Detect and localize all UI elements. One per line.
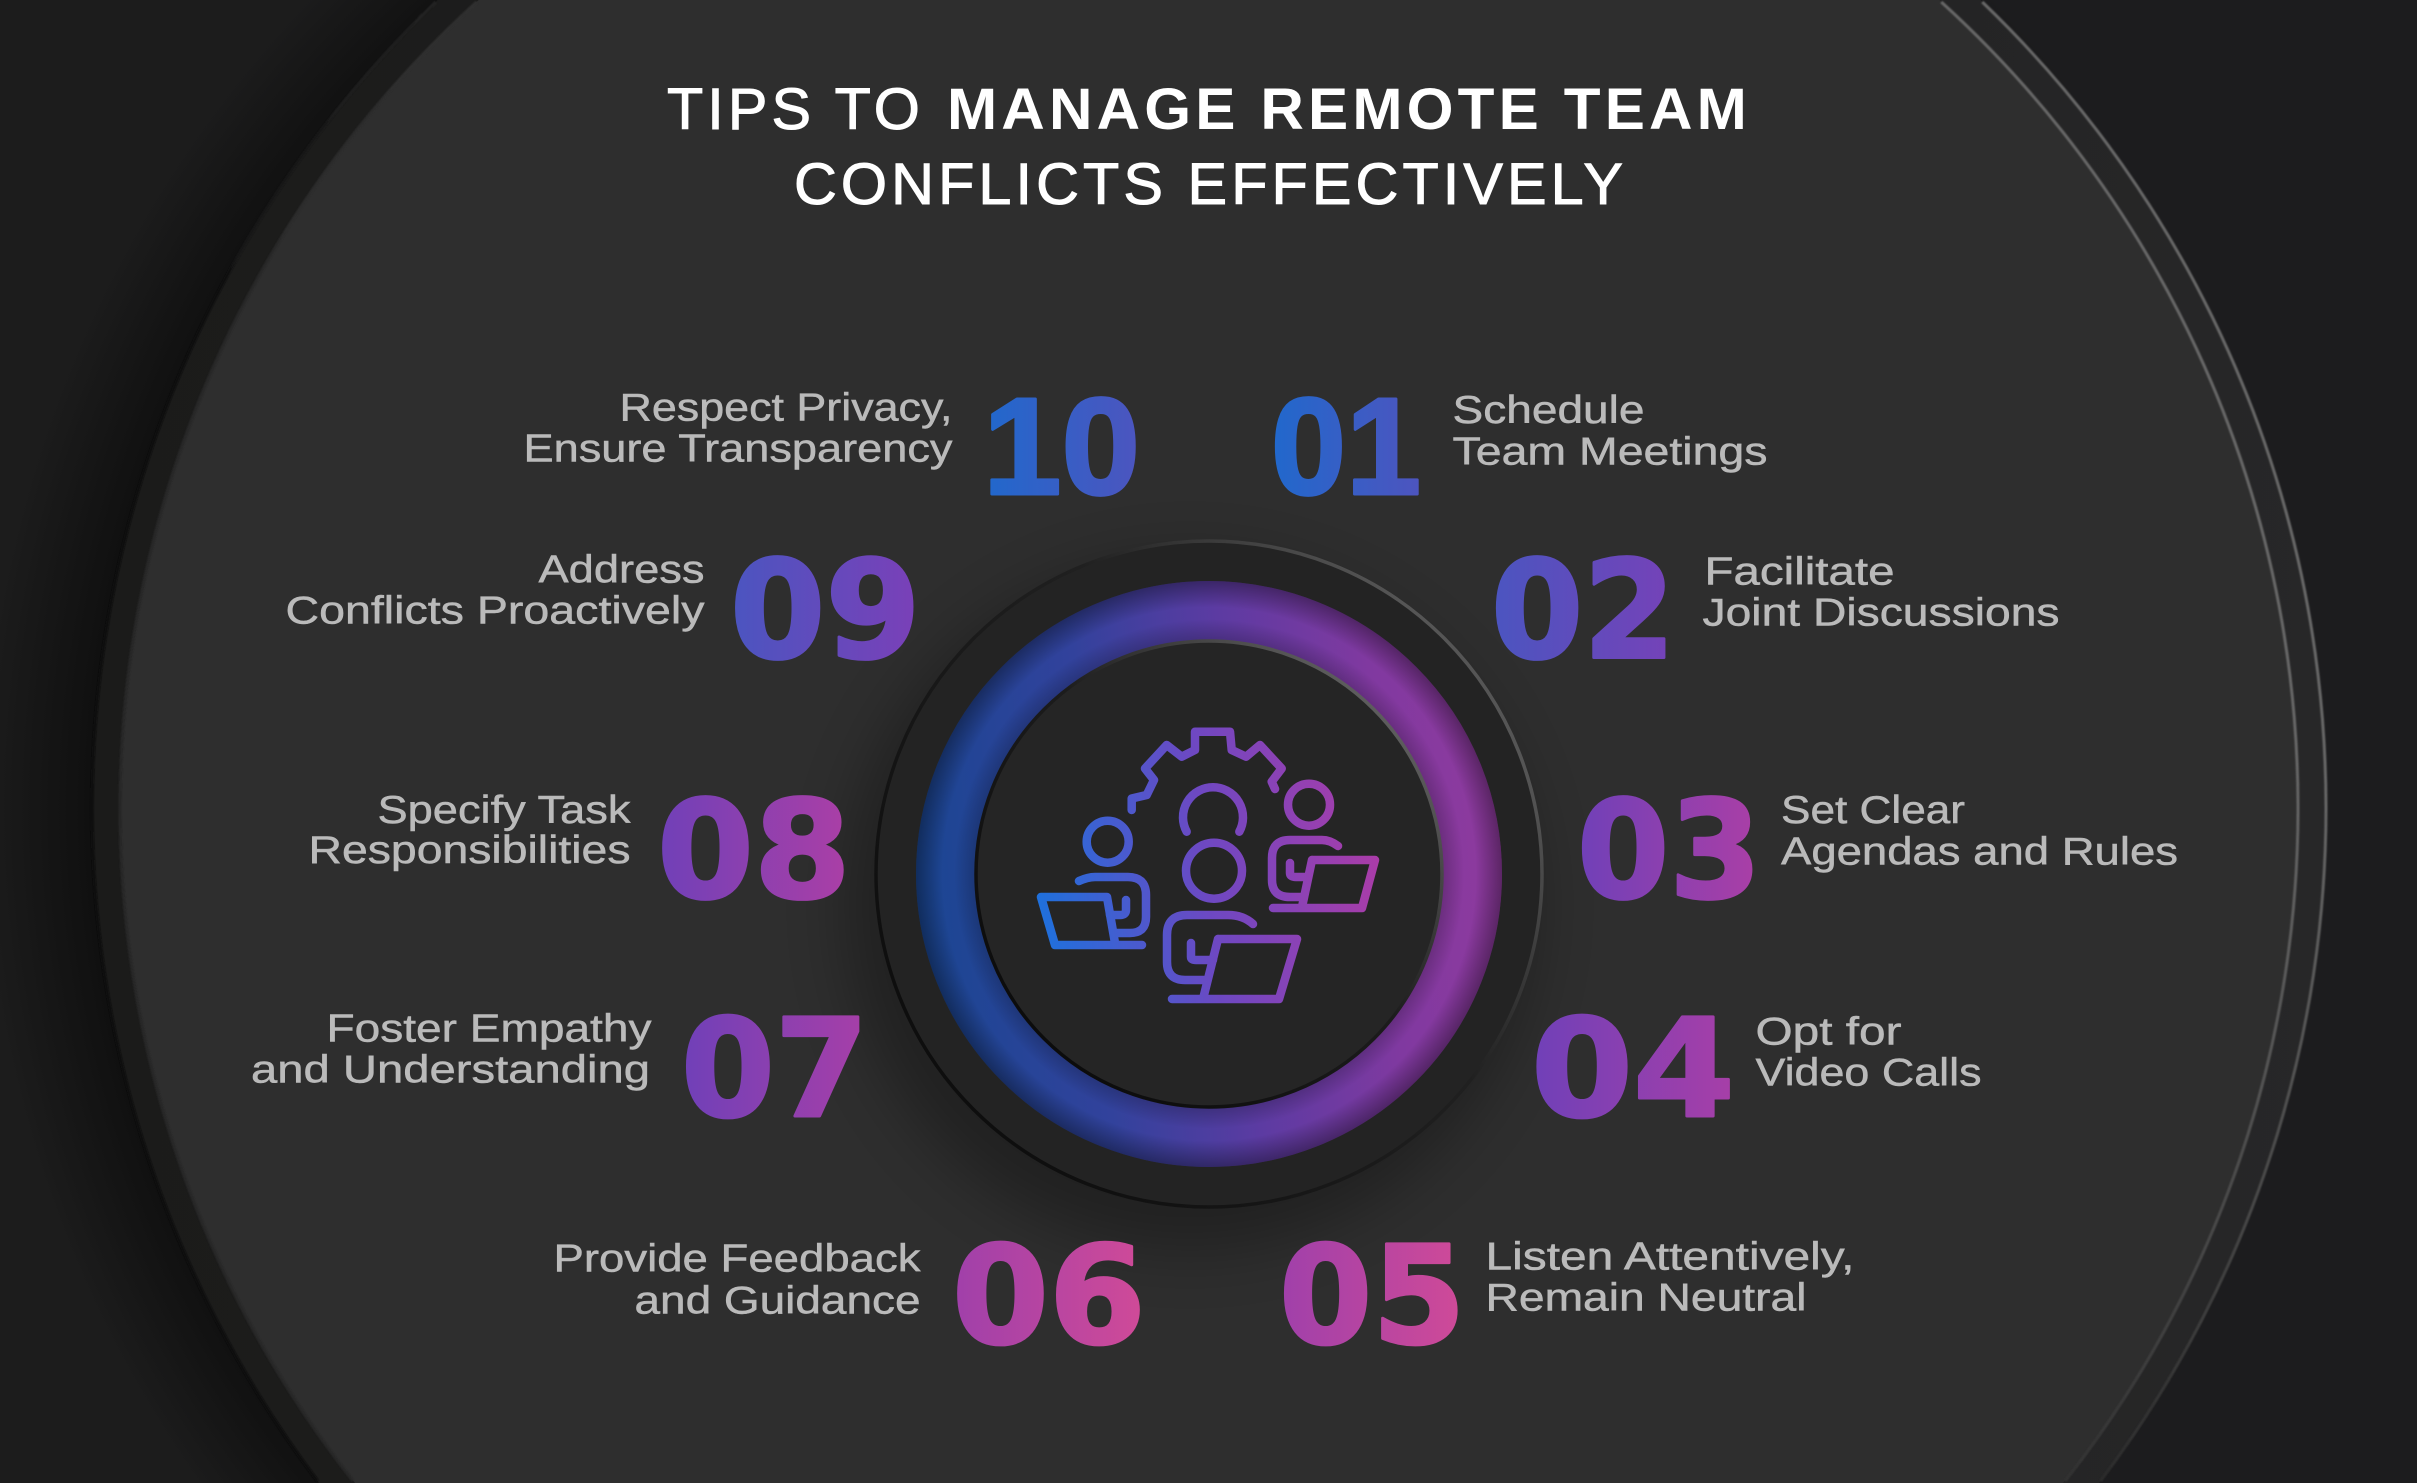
tip 08 — [308, 772, 851, 930]
label 07 line 2: and Understanding — [251, 1048, 650, 1092]
tip 09 — [286, 532, 921, 690]
label 10 line 2: Ensure Transparency — [524, 428, 953, 470]
tip 06 — [554, 1218, 1146, 1376]
hub inner disc — [976, 641, 1442, 1107]
gradient ring — [946, 611, 1472, 1137]
number 05: 05 — [1279, 1218, 1466, 1376]
label 05 line 1: Listen Attentively, — [1486, 1236, 1854, 1278]
hub outer disc — [876, 541, 1542, 1207]
label 09 line 2: Conflicts Proactively — [286, 590, 705, 632]
label 01 line 1: Schedule — [1452, 389, 1644, 432]
label 08 line 1: Specify Task — [378, 789, 631, 832]
icon: centre person — [1167, 843, 1297, 999]
tip 10 — [524, 370, 1140, 524]
label 10 line 1: Respect Privacy, — [620, 386, 952, 430]
icon: remote team with gear and laptops — [1041, 732, 1375, 999]
icon: left person — [1041, 821, 1146, 945]
icon: right person — [1272, 784, 1375, 908]
tip 01 — [1271, 370, 1768, 524]
title — [667, 77, 1751, 217]
title line 1 light part: TIPS TO — [667, 77, 924, 142]
tip 04 — [1531, 991, 1982, 1149]
centre disc shadow — [845, 560, 1535, 1250]
tip 02 — [1491, 532, 2060, 690]
number 06: 06 — [952, 1218, 1146, 1376]
tip 03 — [1577, 772, 2178, 930]
label 06 line 1: Provide Feedback — [554, 1238, 921, 1280]
centre hub — [876, 541, 1542, 1207]
number 03: 03 — [1577, 772, 1762, 930]
label 09 line 1: Address — [538, 548, 704, 592]
tip 07 — [251, 991, 869, 1149]
number 10: 10 — [983, 370, 1140, 524]
number 09: 09 — [730, 532, 921, 690]
title line 1 bold part: MANAGE REMOTE TEAM — [947, 77, 1751, 142]
label 06 line 2: and Guidance — [634, 1280, 920, 1322]
label 04 line 1: Opt for — [1756, 1010, 1902, 1054]
label 02 line 2: Joint Discussions — [1702, 592, 2060, 634]
label 05 line 2: Remain Neutral — [1486, 1276, 1806, 1320]
label 02 line 1: Facilitate — [1704, 550, 1894, 594]
number 04: 04 — [1531, 991, 1735, 1149]
label 03 line 1: Set Clear — [1781, 789, 1965, 832]
tip 05 — [1279, 1218, 1854, 1376]
label 07 line 1: Foster Empathy — [326, 1008, 652, 1050]
number 08: 08 — [657, 772, 851, 930]
label 03 line 2: Agendas and Rules — [1781, 830, 2178, 874]
label 04 line 2: Video Calls — [1756, 1052, 1982, 1094]
number 07: 07 — [681, 991, 869, 1149]
label 01 line 2: Team Meetings — [1452, 430, 1768, 474]
number 02: 02 — [1491, 532, 1676, 690]
icon: gear — [1132, 732, 1282, 832]
title line 2: CONFLICTS EFFECTIVELY — [794, 152, 1627, 217]
number 01: 01 — [1271, 370, 1421, 524]
ring shading — [946, 611, 1472, 1137]
label 08 line 2: Responsibilities — [308, 829, 630, 872]
